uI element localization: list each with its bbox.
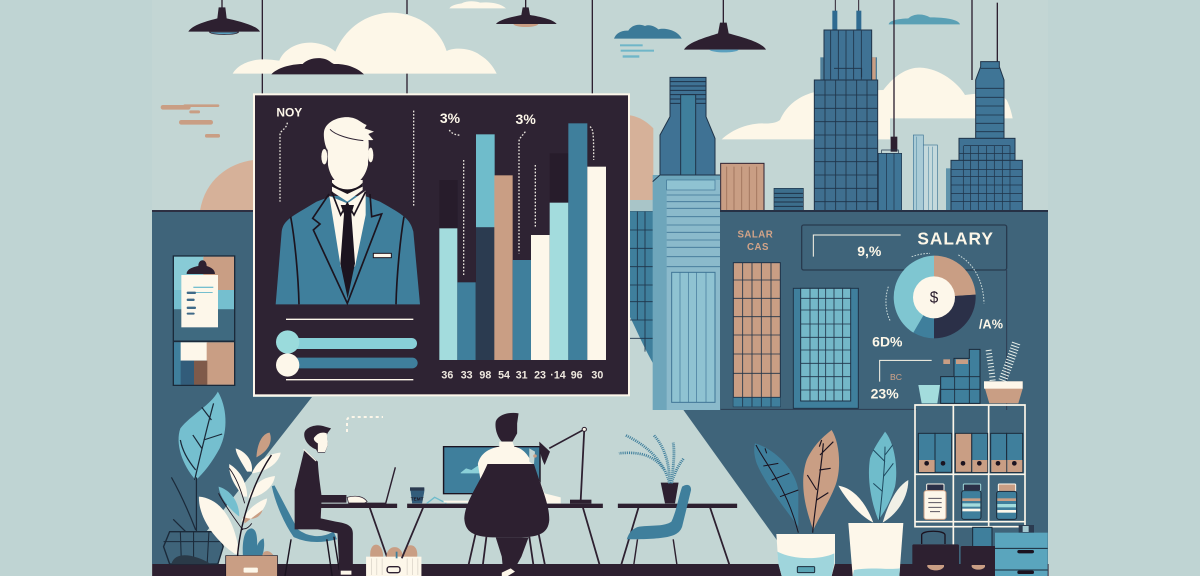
bar axis labels [441,370,603,382]
blue drawers [995,525,1048,576]
pie chart: $ [930,290,939,307]
laptop [349,467,395,503]
big cream cloud [233,13,497,74]
dashed leader lines [280,111,594,275]
antenna building [878,0,902,211]
tan building [721,163,764,211]
floor [152,564,1049,576]
bar percent labels: 3% [440,110,461,126]
label: NOY: NOY [276,105,302,119]
coffee cup [410,487,424,503]
wall: right with diagonal [630,211,1048,564]
large chair back [464,464,549,576]
blue cloud small [889,14,960,24]
label: A%: /A% [979,317,1003,331]
shelf plant [984,342,1023,403]
small navy building [774,188,803,211]
sun lower band [630,200,653,212]
tie [340,205,355,298]
small cream cloud [449,1,506,8]
right wall content [630,175,1047,410]
colour blocks lower [174,342,234,385]
binders [918,433,1023,472]
inner dark panel outline [721,270,1007,410]
cup on shelf [918,385,940,403]
person portrait [276,117,420,304]
thought dashes [347,417,383,432]
chair left [273,486,339,576]
wall top line [721,209,1047,212]
lamp centre [496,0,557,27]
lamp left [188,0,260,34]
main tower [814,0,878,211]
tall light building [653,175,720,410]
hair [324,117,374,150]
hanging cords [262,0,592,95]
lamp right [684,0,766,52]
bar axis labels: 54 [498,370,510,382]
left plant pot [776,534,835,576]
dark cloud [271,58,364,74]
bar chart [439,123,606,360]
slider two [276,353,418,377]
label: BC: BC [890,372,902,382]
callout bracket [813,235,901,257]
mini chart blocks [941,349,980,403]
cream variegated plant [199,433,281,557]
callout box [802,225,1007,270]
teal leaf centre plant [838,432,908,523]
lower scene left: floor, plants, people, desks [152,392,1049,576]
wall: left [152,211,312,564]
shirt [329,191,366,267]
suitcases [912,527,996,576]
tan dashes [161,104,220,138]
label: salar cas: SALAR [737,229,773,240]
slider rules [286,319,413,380]
label: salar cas: CAS [747,242,769,253]
clip [187,260,215,274]
clipboard wall chart [173,256,235,385]
tan leaf [803,430,839,533]
bar axis labels: 23 [534,370,546,382]
label: 60%: 6D% [872,334,903,350]
sun right [628,115,653,200]
shopping bag [366,546,421,576]
desk left [318,504,397,558]
frame [173,256,235,385]
panel frame [254,94,629,395]
main desk [402,504,603,576]
ears [321,149,327,164]
head [327,123,369,186]
monitor [444,447,540,503]
city skyline [614,0,1022,212]
bar axis labels: 33 [461,370,473,382]
jar: blue [962,484,981,519]
bar axis labels: ·14 [550,370,566,382]
blue cloud with dashes [614,25,682,58]
clipboard sheet [181,275,218,327]
lower scene right: plants, shelf, cases [754,342,1048,576]
sky: clouds, suns and lamps [161,0,653,211]
desk lamp [539,427,591,504]
person right from behind [478,413,561,503]
neck [332,180,363,202]
leaf plant tall [171,392,226,532]
left grid building [630,212,654,365]
small paper fold [427,497,446,503]
pocket square [373,253,391,258]
blue grid building [793,288,858,408]
jar: cream [924,484,946,519]
shelf frame [915,405,1025,547]
bar percent labels [440,110,536,127]
potted fern [619,435,684,503]
centre pot [848,523,903,576]
coffee cup: TEMT [411,497,424,502]
bar percent labels: 3% [516,111,536,127]
tan grid building [733,263,780,407]
slider one [276,330,417,354]
label: 23%: 23% [871,385,899,401]
lower bracket [880,360,932,382]
colour blocks upper [173,257,235,341]
tall tower top [660,77,715,177]
blue leaf [754,443,798,533]
heading: salary: SALARY [917,228,994,248]
person left working on laptop [295,425,367,575]
sun left [200,160,253,211]
jar: tan [997,484,1017,519]
cream cloud behind buildings [722,68,1013,139]
label: 9%: 9,% [857,243,882,259]
wire planter [164,532,223,564]
bar axis labels: 31 [516,370,528,382]
pie chart [894,256,976,338]
lapels and seams [291,192,404,304]
sheet lines [187,287,213,315]
wall top edges [152,210,1048,212]
jacket [276,196,420,304]
label: salar cas [737,229,773,253]
bar backdrop shades [439,153,568,228]
chair right [627,485,691,576]
cardboard box [226,551,277,576]
bar axis labels: 98 [479,370,491,382]
right desk [618,504,737,576]
bar axis labels: 30 [591,370,603,382]
main dark dashboard panel [254,94,629,395]
bar axis labels: 36 [441,370,453,382]
right tower [946,0,1022,211]
pie dashed arcs [886,253,984,322]
light towers [913,135,937,211]
bar axis labels: 96 [571,370,583,382]
